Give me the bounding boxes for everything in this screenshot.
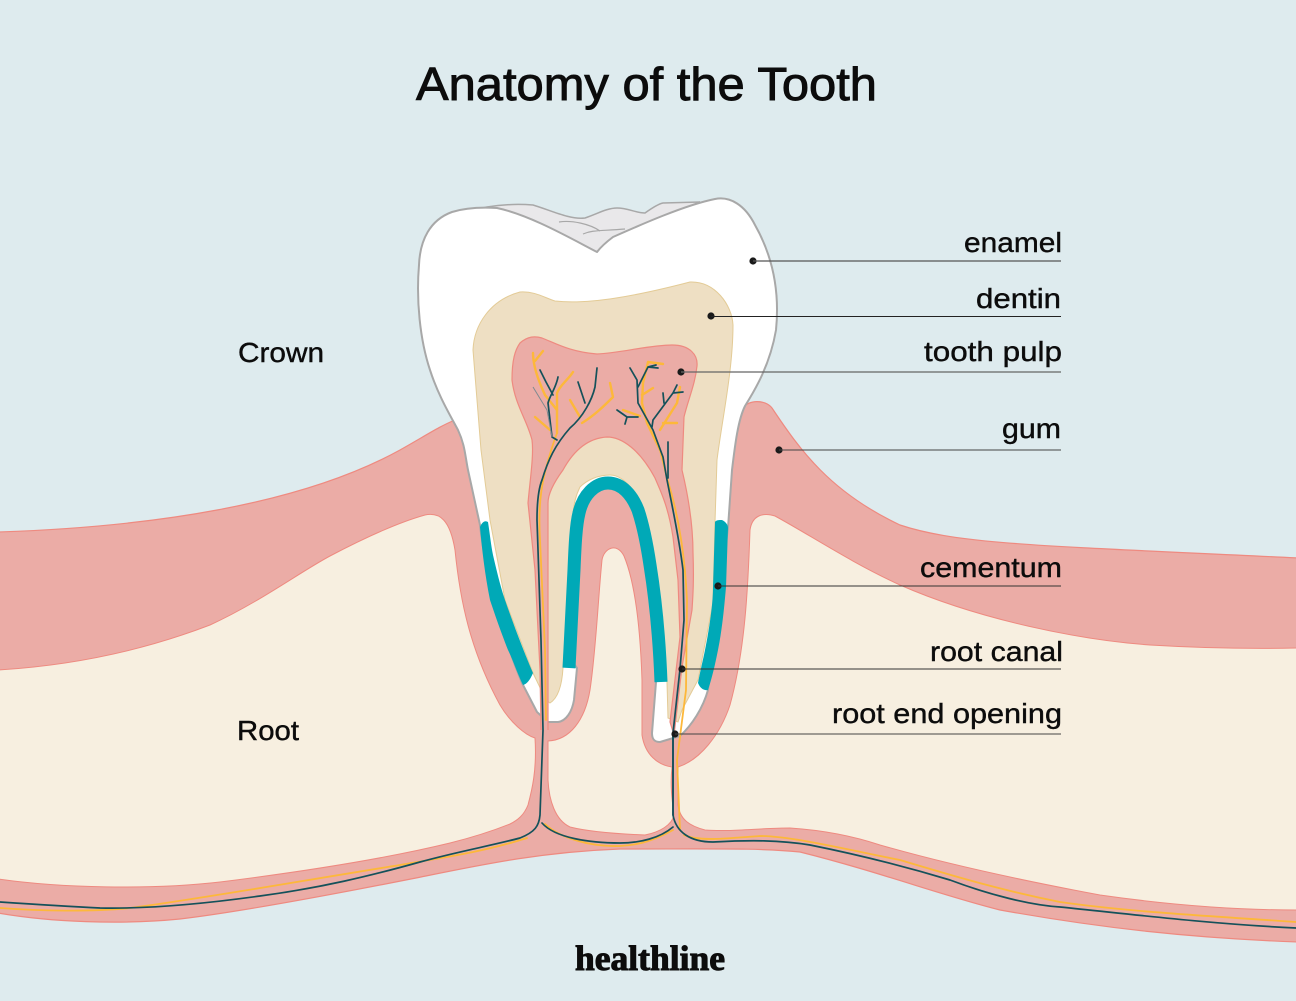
left jaw bone (0, 514, 535, 887)
cementum: left root (480, 521, 533, 685)
right jaw bone (678, 515, 1296, 910)
cementum (480, 483, 728, 690)
label: Root: Root (237, 715, 299, 746)
nerves: yellow blood vessels (0, 351, 1296, 922)
label: cementum: cementum (920, 552, 1062, 583)
label: gum: gum (1002, 413, 1061, 444)
label: Crown: Crown (238, 337, 324, 368)
title: Anatomy of the Tooth (416, 58, 877, 110)
tooth pulp and root canals (512, 337, 697, 735)
nerve: grey thin branch (533, 387, 552, 437)
label line: cementum (714, 582, 1061, 590)
label: root canal: root canal (930, 636, 1063, 667)
crown surface grooves (559, 221, 625, 234)
tooth crown biting surface (487, 202, 700, 252)
cementum: right root (698, 520, 728, 690)
nerves: dark nerve fibres (0, 365, 1296, 928)
gum and soft tissue (0, 402, 1296, 942)
label line: tooth pulp (677, 368, 1061, 376)
label line: root end opening (671, 730, 1061, 738)
label line: enamel (749, 257, 1061, 265)
label: tooth pulp: tooth pulp (924, 336, 1062, 367)
label line: root canal (678, 665, 1061, 673)
label line: dentin (707, 312, 1061, 320)
dentin (473, 282, 733, 722)
label: dentin: dentin (976, 283, 1061, 314)
healthline logo: healthline (575, 939, 725, 978)
tooth enamel outline (418, 198, 777, 742)
cementum: inner arch (569, 483, 661, 682)
label line: gum (775, 446, 1061, 454)
middle jaw bone (548, 548, 674, 835)
label: root end opening: root end opening (832, 698, 1062, 729)
label: enamel: enamel (964, 227, 1062, 258)
